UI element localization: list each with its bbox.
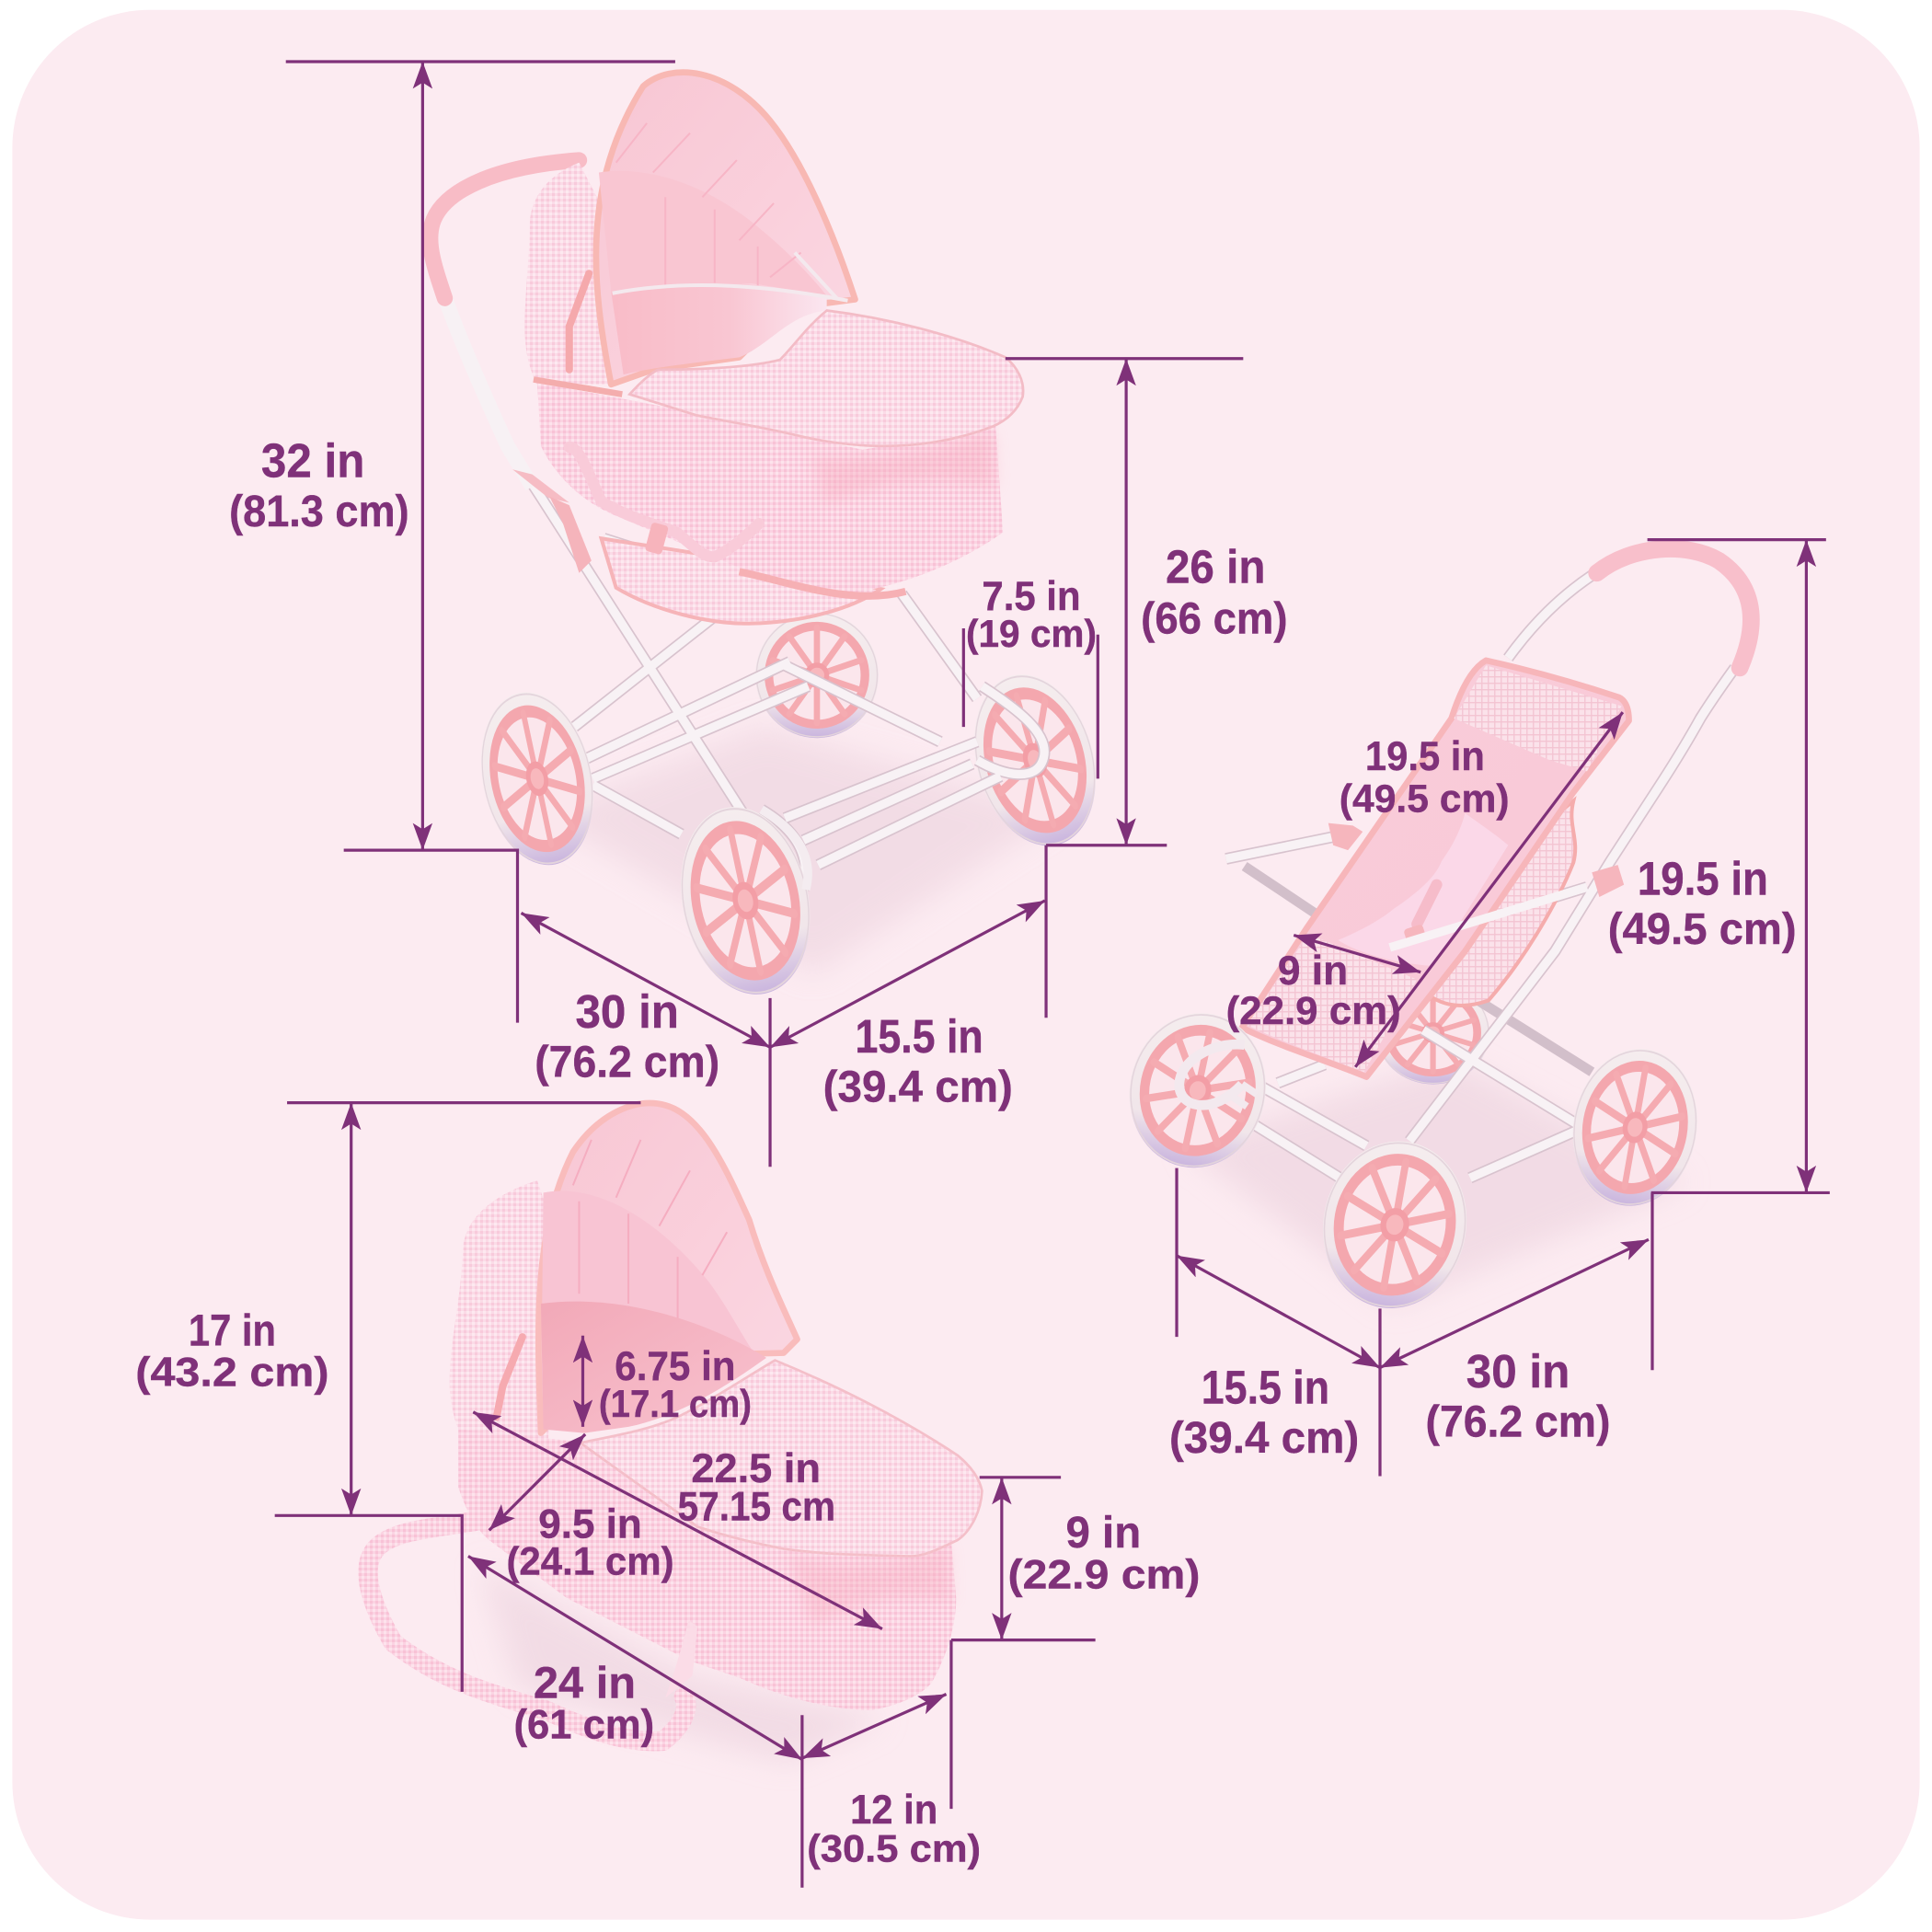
seat length 19.5 in: 19.5 in	[1365, 734, 1485, 779]
quilting	[616, 123, 801, 286]
front fork	[762, 810, 808, 890]
basket interior	[611, 282, 827, 374]
width 12 in: (30.5 cm)	[807, 1827, 981, 1870]
hood clip	[497, 1337, 523, 1417]
width 15.5 in: (39.4 cm)	[823, 1062, 1013, 1111]
cover	[581, 1361, 982, 1557]
seat length 19.5 in	[1340, 712, 1623, 1067]
interior	[541, 1302, 766, 1433]
pink armrest clips	[1328, 823, 1624, 942]
armrest over seat	[1390, 887, 1587, 948]
carry strap	[569, 447, 759, 557]
width 15.5 in: 15.5 in	[855, 1010, 983, 1063]
strap end on body	[665, 1620, 697, 1698]
hood inner	[542, 1190, 752, 1350]
inner width 9.5 in: 9.5 in	[538, 1501, 642, 1547]
seat back side	[1430, 801, 1575, 1006]
seat length 19.5 in: (49.5 cm)	[1340, 777, 1510, 822]
height 26 in	[1006, 359, 1288, 845]
length 30 in: 30 in	[575, 985, 679, 1038]
length 30 in: 30 in	[1466, 1345, 1570, 1397]
product: stroller	[1115, 549, 1751, 1319]
height 32 in: 32 in	[261, 434, 364, 488]
lilac cross tubes	[1245, 867, 1592, 1072]
inner length 22.5 in	[473, 1412, 882, 1629]
tray trim	[740, 571, 905, 596]
width 12 in: 12 in	[850, 1788, 937, 1833]
product: bassinet	[368, 1103, 982, 1762]
handle grip	[1597, 549, 1751, 668]
carry strap	[368, 1518, 686, 1742]
height 19.5 in	[1608, 540, 1830, 1192]
footrest tray	[512, 469, 569, 502]
height 32 in: (81.3 cm)	[229, 487, 409, 536]
hood lining	[538, 1103, 798, 1433]
rear wheels	[755, 613, 1115, 860]
body shading	[788, 1547, 951, 1627]
height 17 in: 17 in	[189, 1305, 276, 1355]
hood inner	[599, 171, 827, 295]
width 15.5 in	[1169, 1168, 1380, 1476]
dimensions: stroller	[1169, 540, 1830, 1476]
upper handle tube	[446, 301, 533, 487]
height 17 in: (43.2 cm)	[135, 1351, 329, 1396]
basket body	[537, 382, 1003, 594]
length 24 in: 24 in	[534, 1659, 636, 1708]
left axle tubes	[1232, 1085, 1257, 1107]
seat width 9 in: (22.9 cm)	[1226, 989, 1401, 1033]
dimensions: full pram	[229, 62, 1288, 1167]
hood support bar	[613, 253, 847, 301]
wheel width 7.5 in: (19 cm)	[966, 612, 1097, 655]
width 15.5 in	[770, 845, 1046, 1167]
hood shell	[450, 1180, 555, 1442]
height 17 in	[135, 1103, 640, 1692]
handle grip	[431, 160, 579, 298]
fork over left wheel	[1179, 1044, 1245, 1105]
seat inner pad	[1338, 813, 1508, 966]
wheel width 7.5 in: 7.5 in	[982, 574, 1081, 619]
length 24 in: (61 cm)	[513, 1703, 654, 1748]
height 32 in	[229, 62, 675, 1023]
inner width 9.5 in	[489, 1434, 674, 1584]
seat width 9 in	[1226, 936, 1420, 1033]
height 26 in: 26 in	[1166, 540, 1265, 592]
seam band	[534, 379, 622, 395]
seat strap	[1417, 885, 1437, 924]
inner length 22.5 in: 57.15 cm	[678, 1485, 835, 1530]
inner width 9.5 in: (24.1 cm)	[506, 1540, 674, 1584]
frame tubes	[1221, 575, 1735, 1183]
product: full pram with bassinet	[431, 73, 1115, 1006]
rear wheel	[1376, 981, 1489, 1085]
height 19.5 in: (49.5 cm)	[1608, 904, 1797, 954]
seat width 9 in: 9 in	[1278, 949, 1348, 994]
clip	[645, 522, 669, 555]
floor shadow	[542, 727, 1060, 973]
height 19.5 in: 19.5 in	[1638, 852, 1768, 904]
quilting	[573, 1140, 727, 1325]
length 30 in: (76.2 cm)	[535, 1038, 719, 1087]
frame joints	[549, 497, 592, 573]
height 9 in: 9 in	[1065, 1508, 1141, 1558]
seat	[1242, 661, 1629, 1077]
hood side clip	[569, 273, 589, 370]
body	[458, 1430, 956, 1710]
basket cover	[629, 311, 1023, 446]
depth 6.75 in: (17.1 cm)	[599, 1382, 752, 1425]
depth 6.75 in	[582, 1336, 752, 1427]
length 30 in	[522, 913, 770, 1087]
floor shadow	[1183, 1060, 1688, 1306]
basket shading	[813, 431, 995, 505]
frame tubes	[444, 298, 1044, 890]
width 15.5 in: 15.5 in	[1202, 1361, 1329, 1413]
front wheels	[1115, 1000, 1709, 1319]
depth 6.75 in: 6.75 in	[615, 1344, 736, 1389]
length 30 in	[1380, 1192, 1652, 1447]
width 12 in	[802, 1640, 981, 1888]
length 24 in	[468, 1557, 802, 1759]
inner length 22.5 in: 22.5 in	[691, 1446, 821, 1491]
seat lower check	[1247, 934, 1417, 1072]
width 15.5 in: (39.4 cm)	[1169, 1413, 1359, 1463]
front wheels	[466, 682, 827, 1006]
height 9 in	[951, 1478, 1200, 1640]
height 9 in: (22.9 cm)	[1008, 1552, 1200, 1597]
hood shell	[524, 163, 616, 385]
under tray	[602, 538, 881, 624]
hood lining	[596, 73, 855, 385]
height 26 in: (66 cm)	[1141, 593, 1288, 643]
length 30 in: (76.2 cm)	[1426, 1397, 1610, 1447]
seat top check	[1454, 665, 1621, 771]
floor shadow	[480, 1565, 887, 1762]
dimensions: bassinet	[135, 1103, 1200, 1888]
wheel width 7.5 in	[963, 574, 1098, 778]
